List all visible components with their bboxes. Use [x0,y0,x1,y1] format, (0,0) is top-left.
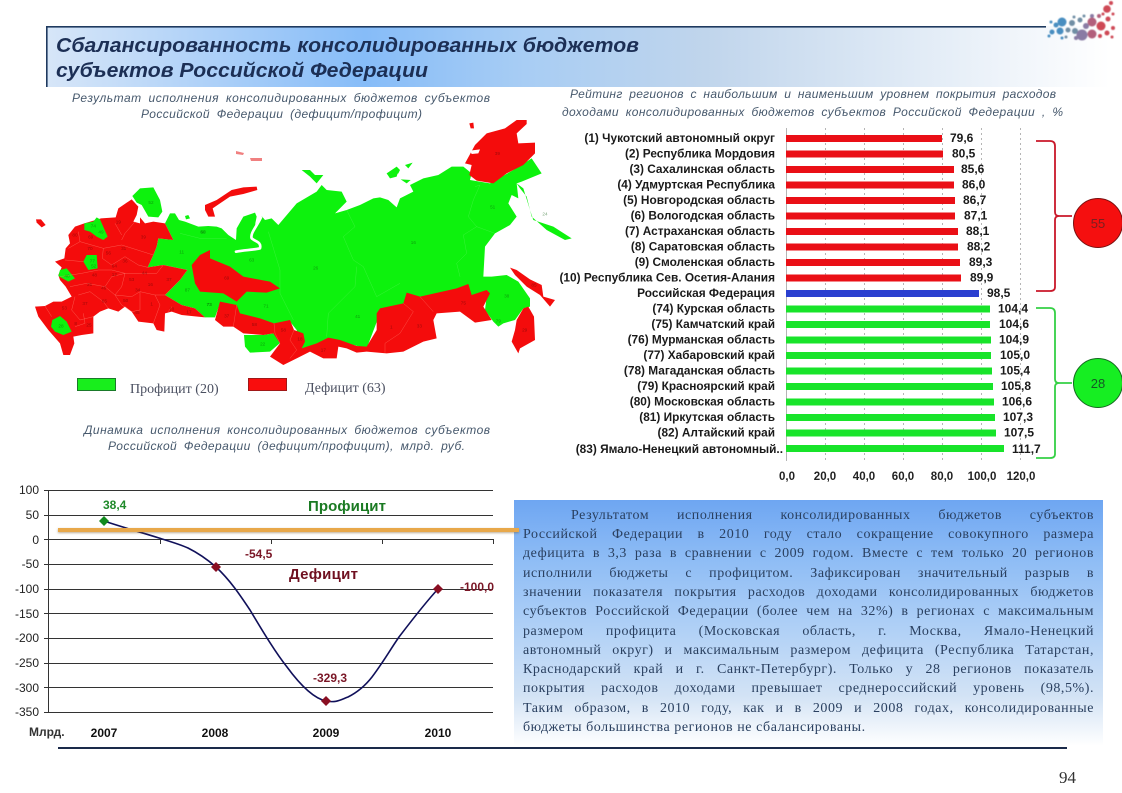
region labels: (10) Республика Сев. Осетия-Алания [559,270,775,284]
region labels: (1) Чукотский автономный округ [584,131,775,145]
bar values: 111,7 [1012,442,1041,456]
map: central and eastern regions: 41 [355,314,361,319]
title [56,34,639,82]
map: European regions: 48 [92,273,97,278]
y axis labels: 0 [32,533,39,547]
map: central and eastern regions: 17 [321,348,326,353]
map: European regions: 73 [206,302,212,307]
subheading: map: Результат исполнения консолидированных бюджетов субъектов [72,91,490,105]
y axis labels: -200 [15,631,39,645]
region labels: (3) Сахалинская область [629,162,775,176]
region labels: (9) Смоленская область [635,255,775,269]
region labels: (78) Магаданская область [624,364,775,378]
bar values: 105,8 [1001,379,1031,393]
text panel: conclusions: значении показателя покрытия расходов доходами консолидированных бюджетов [523,585,1094,600]
bottom rule [58,747,1067,749]
map: far east regions: 51 [490,205,496,210]
x axis labels: 2009 [313,726,340,740]
map: European regions: 46 [101,285,107,290]
bar values: 104,9 [999,332,1029,346]
region labels: (6) Вологодская область [631,208,775,222]
text panel: conclusions: Российской Федерации в 2010 году стало сокращение совокупного размера [523,527,1094,542]
map: far east regions: 79 [496,318,501,323]
bar values: 89,3 [969,255,993,269]
map: central and eastern regions: 22 [260,341,266,346]
map: European regions: 44 [142,271,147,276]
map: far east regions: 75 [461,300,466,305]
region labels: (2) Республика Мордовия [625,146,775,160]
map: central and eastern regions: 16 [411,240,416,245]
subheading: dynamics chart [82,423,490,453]
axis labels: 120,0 [1007,471,1035,483]
map: European regions: 19 [116,219,121,224]
region labels: (82) Алтайский край [658,426,775,440]
region labels: (5) Новгородская область [623,193,775,207]
map: far east regions: 85 [531,283,537,288]
axis labels: 20,0 [814,471,836,483]
subheading: dynamics chart: Динамика исполнения консолидированных бюджетов субъектов [82,423,490,437]
text panel: conclusions: дефицита в 3,3 раза в сравнении с 2009 годом. Вместе с тем только 20 регионов [523,546,1094,561]
map: far east regions: 24 [542,212,548,217]
data labels: -54,5 [245,547,273,561]
map: European regions: 11 [179,249,184,254]
y axis labels: -300 [15,681,39,695]
y axis labels: -350 [15,705,39,719]
subheading: rating: Рейтинг регионов с наибольшим и наименьшим уровнем покрытия расходов [570,87,1056,101]
region labels: (4) Удмуртская Республика [617,178,775,192]
map: European regions: 39 [141,235,146,240]
map: European regions: 25 [86,323,92,328]
map legend [78,378,386,397]
data labels: 38,4 [103,498,127,512]
y axis labels: 50 [26,508,39,522]
y axis labels: -100 [15,582,39,596]
text panel: conclusions: Краснодарский край и г. Санкт-Петербург). Только у 28 регионов показатель [523,662,1094,677]
x axis labels: 2007 [91,726,118,740]
map: central and eastern regions [148,158,542,365]
bar values: 106,6 [1002,394,1032,408]
legend: surplus: Профицит (20) [130,382,219,397]
region labels: Российская Федерация [637,286,775,300]
map: central and eastern regions: 37 [224,314,230,319]
map: European regions: 8 [74,321,77,326]
chart gridlines [44,490,494,712]
map: European regions: 64 [112,263,117,268]
map: European regions [35,187,212,355]
map: European regions: 37 [82,301,88,306]
callout: 28 regions: 28 [1091,376,1105,391]
map: European regions: 60 [200,229,206,234]
map: central and eastern regions: 1 [390,324,393,329]
axis labels [779,471,1035,483]
bar values: 104,4 [998,302,1028,316]
text panel: conclusions: бюджеты большинства регионов не сбалансированы. [523,720,866,735]
map: far east regions: 39 [495,151,500,156]
legend: deficit: Дефицит (63) [305,381,386,396]
data curve [104,521,438,702]
axis labels: 0,0 [779,471,795,483]
axis labels: 40,0 [853,471,875,483]
map: central and eastern regions: 60 [201,229,206,234]
axis labels: 60,0 [892,471,914,483]
map: European regions: 1 [150,301,153,306]
region labels [559,131,783,456]
label: deficit: Дефицит [289,566,358,583]
subheading: rating [562,87,1063,119]
bar values: 105,4 [1000,364,1030,378]
map: central and eastern regions: 58 [252,322,257,327]
bar values: 88,2 [967,240,991,254]
map: European regions: 74 [91,224,96,229]
map: European regions: 28 [58,324,64,329]
map: European regions: 87 [185,288,190,293]
map: surplus regions in the west [51,187,162,335]
map: central and eastern regions: 71 [263,304,269,309]
map: Arctic islands [236,151,262,161]
legend: surplus [78,378,219,397]
map: European regions: 40 [64,274,70,279]
bar values: 88,1 [966,224,990,238]
region labels: (8) Саратовская область [631,240,775,254]
map: central and eastern regions: 69 [224,275,230,280]
map: central and eastern regions: 18 [297,337,303,342]
map: European regions: 69 [88,235,94,240]
x axis labels: Млрд. [29,725,65,739]
map: central and eastern regions: 63 [249,258,255,263]
text panel: conclusions [514,500,1103,746]
map: European regions: 12 [112,272,117,277]
map: European regions: 80 [72,233,78,238]
title: субъектов Российской Федерации [56,59,428,82]
region labels: (75) Камчатский край [651,317,775,331]
y axis labels [15,483,39,719]
data labels: -329,3 [313,671,347,685]
map: far east regions: 33 [417,323,422,328]
label: surplus: Профицит [308,498,386,515]
bars: lowest regions [786,135,961,282]
map: European regions: 34 [135,287,141,292]
chart axes [786,128,1020,461]
map: European regions: 70 [87,246,93,251]
y axis labels: 100 [19,483,39,497]
bar values: 98,5 [987,286,1011,300]
region labels: (77) Хабаровский край [643,348,775,362]
bar values: 80,5 [952,146,976,160]
map: European regions: 21 [87,282,93,287]
page number: 94 [1059,768,1076,787]
callout connector line [58,528,519,532]
bar values: 85,6 [961,162,985,176]
region labels: (80) Московская область [630,394,775,408]
region labels: (7) Астраханская область [625,224,775,238]
map: central and eastern regions: 26 [313,265,319,270]
bracket: lowest group [1036,141,1072,291]
map: central and eastern regions: 73 [207,302,212,307]
y axis labels: -250 [15,656,39,670]
subheading: rating: доходами консолидированных бюджетов субъектов Российской Федерации , % [562,105,1063,119]
map: European regions: 37 [166,277,172,282]
legend: deficit [248,378,386,396]
text panel: conclusions: Результатом исполнения консолидированных бюджетов субъектов [571,508,1094,523]
callout: 28 regions [1074,358,1122,408]
data labels [103,498,494,685]
map of Russia [35,120,572,365]
map: European regions: 52 [91,264,97,269]
bar values: 104,6 [999,317,1029,331]
text panel: conclusions: субъектов Российской Федерации (более чем на 32%) в регионах с максимальным [523,604,1094,619]
y axis labels: -150 [15,607,39,621]
map: European regions: 49 [98,229,104,234]
callout: 55 regions [1074,198,1122,248]
subheading: dynamics chart: Российской Федерации (дефицит/профицит), млрд. руб. [108,439,465,453]
callout: 55 regions: 55 [1091,216,1105,231]
map: European regions: 45 [134,310,140,315]
axis labels: 80,0 [931,471,953,483]
title: Сбалансированность консолидированных бюджетов [56,34,639,57]
data labels: -100,0 [460,580,494,594]
map: European regions: 53 [62,305,67,310]
bar values: 89,9 [970,270,994,284]
bar values: 86,7 [963,193,987,207]
region labels: (83) Ямало-Ненецкий автономный.. [576,442,783,456]
map: far east regions: 29 [522,328,528,333]
x axis labels [29,725,452,740]
x axis labels: 2008 [202,726,229,740]
map: European regions: 36 [122,259,128,264]
subheading: map: Российской Федерации (дефицит/профицит) [141,107,422,121]
region labels: (79) Красноярский край [637,379,775,393]
axis labels: 100,0 [968,471,996,483]
map: European regions: 56 [106,251,111,256]
map: European regions: 53 [129,277,135,282]
text panel: conclusions: Таким образом, в 2010 году, как и в 2009 и 2008 годах, консолидированные [523,701,1094,716]
bar values: 105,0 [1000,348,1030,362]
header band [46,26,1110,87]
bar values: 86,0 [962,178,986,192]
region labels: (76) Мурманская область [628,332,775,346]
line chart: budget balance [15,483,494,740]
bar values: 79,6 [950,131,974,145]
map: European regions: 17 [186,309,192,314]
region labels: (81) Иркутская область [639,410,775,424]
map: region borders [45,222,172,327]
icon: dotted logo [1048,1,1115,40]
text panel: conclusions: размером профицита (Московская область, г. Москва, Ямало-Ненецкий [523,624,1094,639]
map: European regions: 10 [169,307,175,312]
map: central and eastern regions: 58 [281,327,286,332]
bar: Russian Federation [786,290,979,297]
bar values: 107,3 [1003,410,1033,424]
data markers [99,516,443,706]
text panel: conclusions: покрытия расходов доходами превышает среднероссийский уровень (98,5%). [523,681,1094,696]
map: European regions: 16 [148,282,153,287]
map: European regions: 77 [90,258,95,263]
bar values: 87,1 [964,208,988,222]
bar chart: regional rating [559,128,1041,483]
map: far east regions: 38 [504,293,510,298]
bar values: 107,5 [1004,426,1034,440]
map: far east regions [387,120,572,353]
map: European regions: 50 [123,298,129,303]
bracket: highest group [1036,308,1072,458]
bar values [950,131,1041,456]
bars: highest regions [786,306,1004,452]
region labels: (74) Курская область [652,302,775,316]
map: European regions: 52 [148,200,154,205]
text panel: conclusions: исполнили бюджеты с профицитом. Зафиксирован значительный разрыв в [523,566,1094,581]
text panel: conclusions: автономный округ) и максимальным размером дефицита (Республика Татарстан, [523,643,1094,658]
x axis labels: 2010 [425,726,452,740]
map: European regions: 65 [102,299,107,304]
subheading: map [72,91,490,121]
map: European regions: 31 [121,246,127,251]
y axis labels: -50 [22,557,39,571]
